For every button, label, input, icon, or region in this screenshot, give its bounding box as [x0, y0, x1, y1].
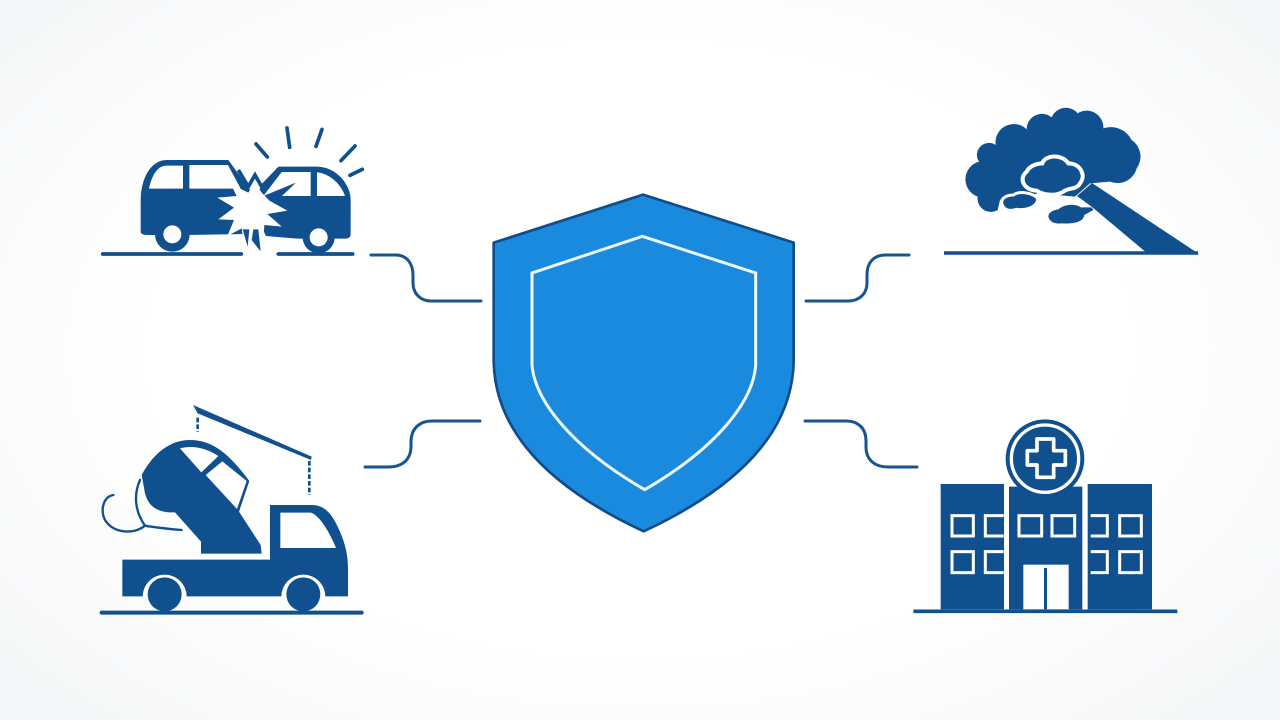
connector: hospital to shield — [805, 421, 917, 467]
entrance doors — [1023, 565, 1069, 609]
ground line — [102, 607, 362, 619]
wheels — [148, 577, 182, 611]
left wing — [941, 484, 1004, 609]
left wheel — [155, 217, 190, 252]
starburst — [217, 183, 287, 242]
ground lines — [103, 248, 353, 259]
icon: hospital — [913, 419, 1177, 611]
right car — [250, 167, 351, 239]
medical cross — [1027, 439, 1065, 477]
shield body — [494, 195, 794, 531]
tow hook cable — [103, 480, 182, 532]
dark spikes — [263, 183, 296, 199]
cab window — [280, 513, 336, 548]
ground line — [913, 606, 1177, 617]
bottom spikes — [243, 229, 261, 251]
impact burst — [217, 169, 296, 251]
right wheel — [303, 221, 335, 253]
roof crumple line — [238, 169, 278, 187]
central shield — [494, 195, 794, 531]
tower dome — [1006, 419, 1084, 498]
medical emblem ring — [1011, 425, 1079, 492]
shield inner outline — [532, 236, 756, 490]
truck body — [122, 505, 348, 596]
crane arm — [193, 405, 312, 460]
connector: tow truck to shield — [365, 421, 480, 467]
lifted car windows — [180, 447, 247, 509]
tree trunk — [1077, 183, 1199, 254]
tree crown — [965, 108, 1140, 212]
ground line — [944, 251, 1198, 255]
left car windows — [149, 165, 241, 189]
right wing — [1088, 484, 1152, 609]
tree canopy — [965, 108, 1140, 224]
central tower — [1009, 487, 1082, 609]
icon: car crash — [103, 128, 362, 254]
right small cloud — [1048, 205, 1093, 224]
connector: car crash to shield — [371, 255, 481, 301]
lifted car — [142, 440, 262, 554]
icon: tow truck lifting car — [102, 405, 362, 613]
right car windows — [263, 172, 345, 196]
icon: fallen tree — [944, 108, 1199, 254]
wheel arches — [143, 575, 325, 597]
left small cloud — [1002, 193, 1038, 210]
inner cloud — [1023, 156, 1083, 195]
left car — [141, 160, 257, 235]
crane chains — [198, 418, 309, 495]
windows — [952, 516, 1141, 573]
connector: fallen tree to shield — [806, 255, 909, 301]
impact rays — [256, 128, 362, 175]
